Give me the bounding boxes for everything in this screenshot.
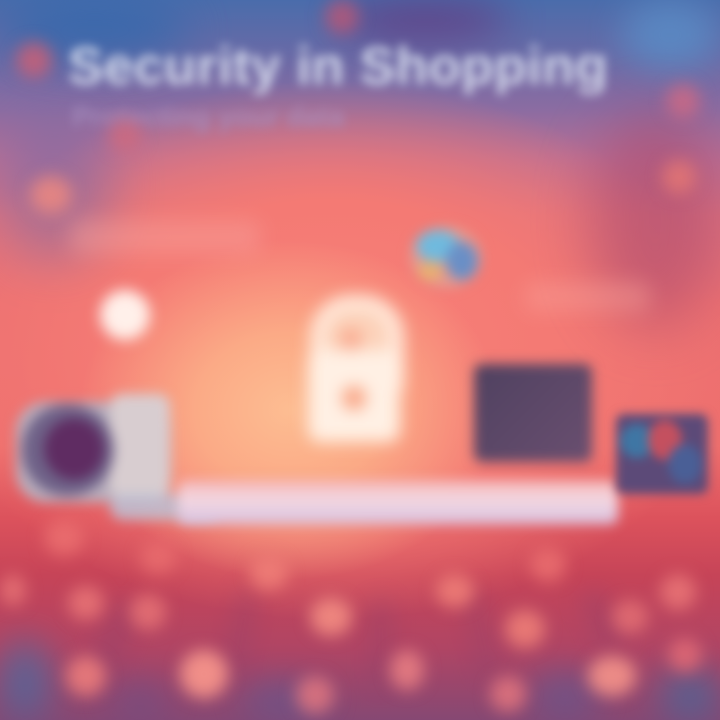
- subtitle: Protecting your data: [72, 101, 344, 132]
- camera body: [16, 402, 171, 502]
- dark tablet: [474, 364, 592, 462]
- padlock keyholes: [340, 328, 362, 350]
- laptop keyboard bar: [178, 480, 618, 524]
- icon: round white badge: [100, 290, 150, 340]
- camera side: [110, 394, 170, 498]
- faint text band: [70, 220, 260, 254]
- padlock shackle: [310, 295, 404, 390]
- icon: padlock: [298, 285, 414, 452]
- icon: chat bubble: [407, 220, 488, 291]
- camera base: [110, 494, 220, 520]
- phone card: [616, 414, 708, 494]
- padlock body: [308, 350, 400, 442]
- camera lens: [22, 404, 114, 496]
- faint text band right: [525, 282, 650, 312]
- camera: [8, 386, 211, 528]
